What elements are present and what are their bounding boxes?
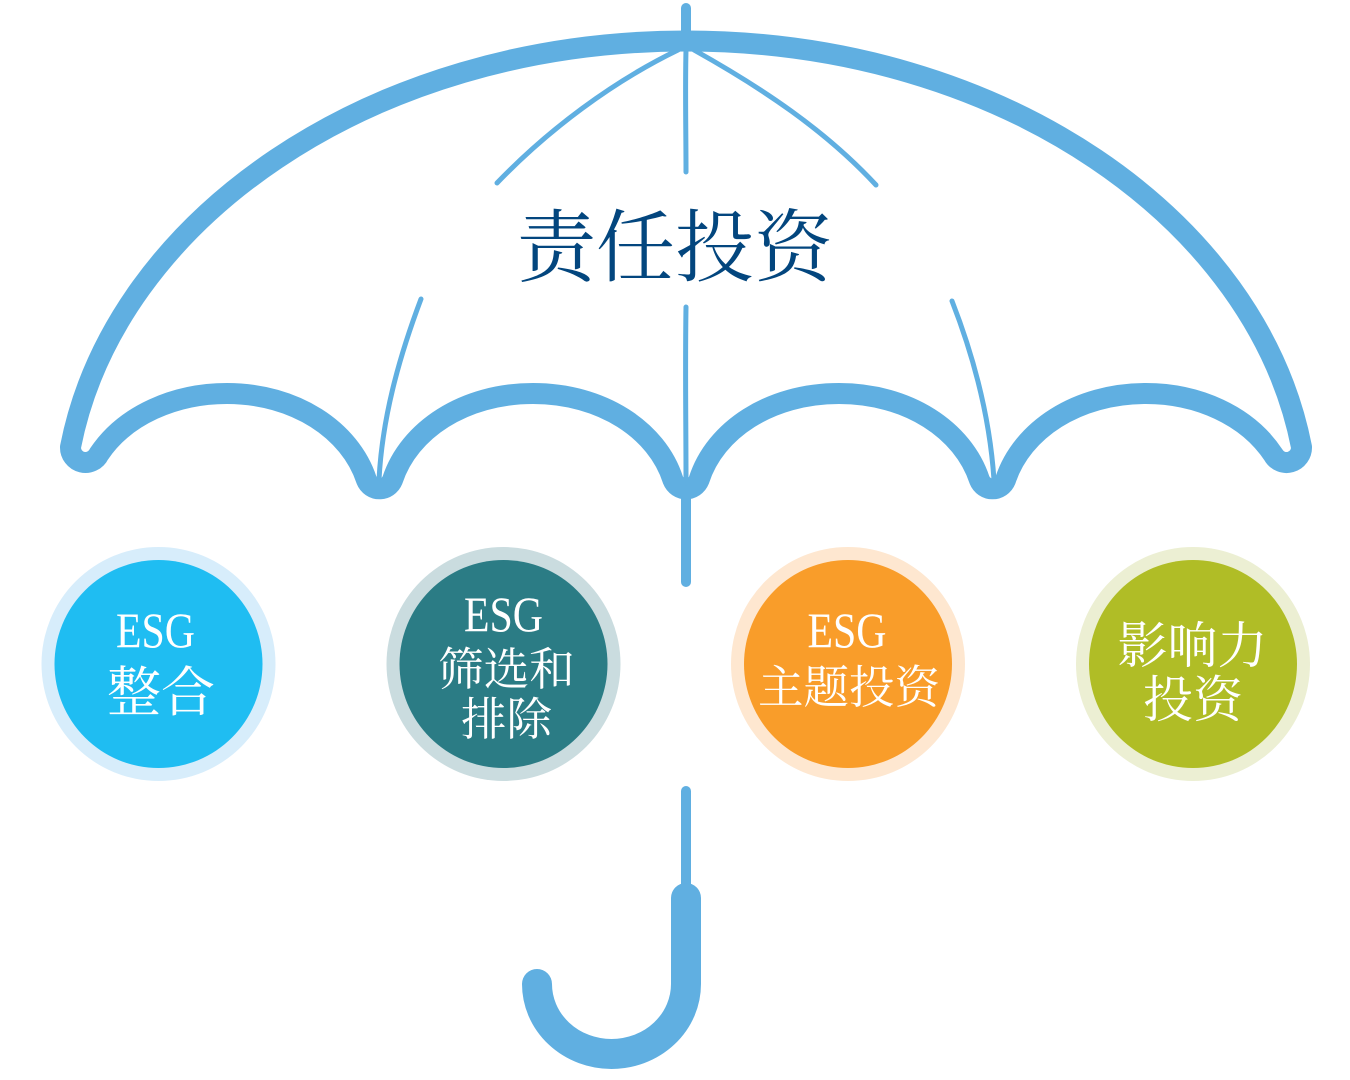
- label: ESG thematic investing: [758, 602, 941, 713]
- upper centre rib: [683, 50, 688, 172]
- title: 责任投资: [517, 206, 835, 293]
- label: ESG screening and exclusion: ESG: [464, 586, 543, 642]
- circle: impact investing: [1076, 547, 1310, 781]
- circle: ESG thematic investing: [731, 547, 965, 781]
- circle: ESG screening and exclusion: [386, 547, 620, 781]
- circle: ESG integration: [42, 547, 276, 781]
- label: impact investing: 投资: [1143, 672, 1244, 728]
- label: impact investing: [1118, 618, 1268, 728]
- upper left rib: [497, 50, 678, 183]
- label: ESG integration: ESG: [116, 602, 195, 658]
- label: ESG thematic investing: 主题投资: [758, 662, 941, 713]
- label: ESG screening and exclusion: 筛选和: [438, 644, 575, 695]
- upper right rib: [694, 50, 876, 185]
- label: ESG integration: [107, 602, 215, 723]
- lower shaft: [681, 791, 691, 895]
- label: impact investing: 影响力: [1118, 618, 1268, 674]
- umbrella tip: [681, 8, 691, 40]
- label: ESG screening and exclusion: 排除: [461, 694, 552, 745]
- lower right rib: [952, 301, 994, 480]
- lower centre rib: [683, 307, 688, 480]
- upper shaft: [681, 490, 691, 582]
- label: ESG screening and exclusion: [438, 586, 575, 745]
- label: ESG thematic investing: ESG: [808, 602, 886, 658]
- lower left rib: [379, 299, 421, 480]
- umbrella canopy outline: [70, 41, 1302, 489]
- handle: [537, 898, 686, 1054]
- label: ESG integration: 整合: [107, 663, 215, 723]
